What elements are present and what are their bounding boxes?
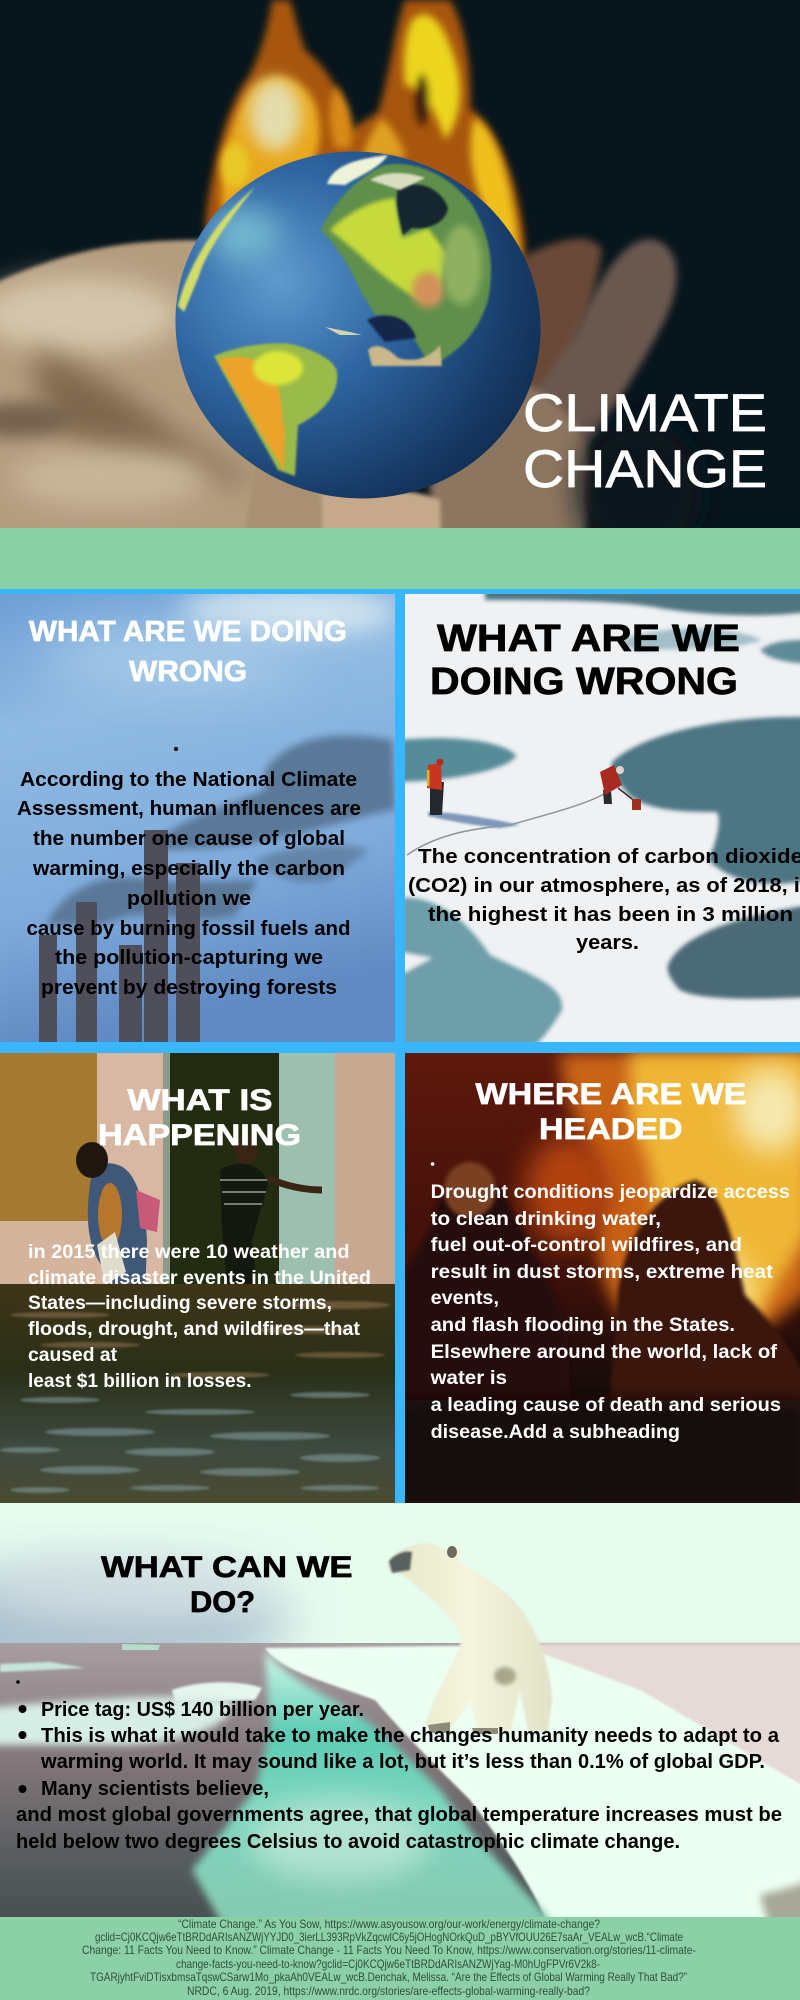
icon: wall	[97, 1053, 163, 1285]
text block: to clean drinking water,	[431, 1209, 661, 1230]
text block: water is	[430, 1368, 507, 1389]
text block: bullet list: warming world. It may sound like a lot, but it’s less than 0.1% of global GDP.	[40, 1751, 765, 1773]
panel: what is happening (flood)	[0, 1053, 395, 1503]
icon: hand	[0, 239, 702, 560]
text block	[17, 747, 361, 999]
heading	[475, 1083, 746, 1140]
text block: States—including severe storms,	[28, 1293, 332, 1314]
text block: bullet list: This is what it would take to make the changes humanity needs to adapt to a	[41, 1725, 780, 1747]
north america	[321, 164, 491, 366]
text block: the highest it has been in 3 million	[428, 904, 793, 926]
panel: what can we do (polar bear on ice)	[0, 1503, 800, 1930]
title: CHANGE	[523, 440, 767, 499]
panel: what are we doing wrong (smokestacks)	[0, 586, 400, 1042]
panel: where are we headed (wildfire)	[395, 1053, 800, 1520]
footer: citations	[0, 1917, 800, 2000]
text block: events,	[431, 1288, 499, 1309]
text block: the pollution-capturing we	[55, 947, 323, 969]
icon: smokestacks	[39, 830, 200, 1042]
icon: flames	[205, 0, 525, 290]
heading: WHERE ARE WE	[476, 1078, 746, 1111]
footer: citations: gclid=Cj0KCQjw6eTtBRDdARIsANZWjYYJD0_3ierLL393RpVkZqcwlC6y5jOHogNOrkQuD_pBYVfOUU26E7saAr_VEALw_wcB.“Climate	[95, 1930, 683, 1944]
icon: firefighter silhouettes	[395, 1162, 800, 1520]
footer: citations: Change: 11 Facts You Need to Know.” Climate Change - 11 Facts You Need To Know, https://www.conservation.org/stories/11-climate-	[82, 1943, 696, 1957]
text block: and flash flooding in the States.	[431, 1315, 735, 1336]
heading: WHAT ARE WE	[437, 618, 740, 660]
text block: prevent by destroying forests	[41, 977, 337, 999]
text block: Elsewhere around the world, lack of	[431, 1342, 778, 1363]
text block: Drought conditions jeopardize access	[431, 1182, 790, 1203]
text block: in 2015 there were 10 weather and	[28, 1242, 350, 1263]
text block: bullet list: Many scientists believe,	[41, 1778, 269, 1800]
text block: years.	[576, 932, 639, 954]
text block: floods, drought, and wildfires—that	[28, 1319, 361, 1340]
icon: open door	[279, 1053, 335, 1285]
text block: least $1 billion in losses.	[28, 1371, 252, 1392]
icon: melt ponds	[400, 590, 800, 1050]
text block: bullet list: held below two degrees Celsius to avoid catastrophic climate change.	[16, 1831, 680, 1853]
background green band	[0, 528, 800, 589]
heading	[100, 1088, 300, 1146]
text block: According to the National Climate	[20, 769, 357, 791]
footer: citations: NRDC, 6 Aug. 2019, https://www.nrdc.org/stories/are-effects-global-warming-really-bad?	[187, 1984, 590, 1998]
text block: fuel out-of-control wildfires, and	[431, 1235, 742, 1256]
rim light	[178, 187, 255, 312]
text block: (CO2) in our atmosphere, as of 2018, is	[408, 875, 800, 897]
text block: disease.Add a subheading	[431, 1422, 680, 1443]
icon: sea	[0, 1643, 800, 1923]
heading	[28, 620, 346, 682]
icon: polar bear	[388, 1543, 552, 1734]
text block: the number one cause of global	[33, 828, 345, 850]
icon: floodwater	[0, 1284, 395, 1503]
heading: WHAT IS	[128, 1084, 272, 1117]
heading	[100, 1556, 352, 1613]
panel: what are we doing wrong (melt ponds)	[400, 590, 800, 1050]
text block	[430, 1162, 790, 1443]
icon: globe	[175, 152, 541, 498]
icon: smoke plumes	[46, 735, 395, 925]
text block: caused at	[28, 1345, 118, 1366]
hero photo: burning globe in hand	[0, 0, 800, 560]
title	[525, 394, 766, 488]
ice cap	[327, 155, 388, 185]
south america	[214, 343, 337, 476]
blue grid background	[0, 589, 800, 1503]
text block: pollution we	[127, 888, 251, 910]
text block: The concentration of carbon dioxide	[418, 846, 800, 868]
heading: WHAT CAN WE	[101, 1551, 352, 1584]
icon: researchers on ice	[407, 758, 641, 855]
text block: bullet list: Price tag: US$ 140 billion per year.	[41, 1699, 364, 1721]
heading	[432, 624, 739, 695]
text block: climate disaster events in the United	[28, 1268, 371, 1289]
text block: cause by burning fossil fuels and	[26, 918, 350, 940]
icon: ice floe	[0, 1644, 800, 1930]
heading: WHAT ARE WE DOING	[29, 616, 347, 648]
heading: DOING WRONG	[430, 661, 738, 703]
icon: plywood board	[0, 1053, 97, 1221]
icon: flames	[525, 1053, 800, 1356]
text block	[28, 1242, 371, 1392]
footer: citations: change-facts-you-need-to-know?gclid=Cj0KCQjw6eTtBRDdARIsANZWjYag-M0hUgFPVr6V2k8-	[176, 1957, 600, 1971]
heading: DO?	[190, 1586, 255, 1619]
text block: result in dust storms, extreme heat	[431, 1262, 774, 1283]
text block	[408, 846, 800, 954]
icon: doorway	[170, 1053, 280, 1285]
text block: warming, especially the carbon	[32, 858, 345, 880]
heading: HEADED	[539, 1113, 683, 1146]
heading: WRONG	[129, 656, 247, 688]
icon: people wading	[76, 1136, 322, 1300]
footer: citations: “Climate Change.” As You Sow, https://www.asyousow.org/our-work/energy/climate-change?	[178, 1917, 600, 1931]
text block: a leading cause of death and serious	[431, 1395, 781, 1416]
text block: bullet list: and most global governments agree, that global temperature increases must be	[16, 1804, 782, 1826]
title: CLIMATE	[523, 384, 767, 443]
footer: citations: TGARjyhtFviDTisxbmsaTqswCSarw1Mo_pkaAh0VEALw_wcB.Denchak, Melissa. “Are the Effects of Global Warming Really That Bad?”	[90, 1970, 687, 1984]
text block: bullet list	[16, 1680, 782, 1853]
text block: Assessment, human influences are	[17, 798, 361, 820]
heading: HAPPENING	[98, 1119, 301, 1152]
